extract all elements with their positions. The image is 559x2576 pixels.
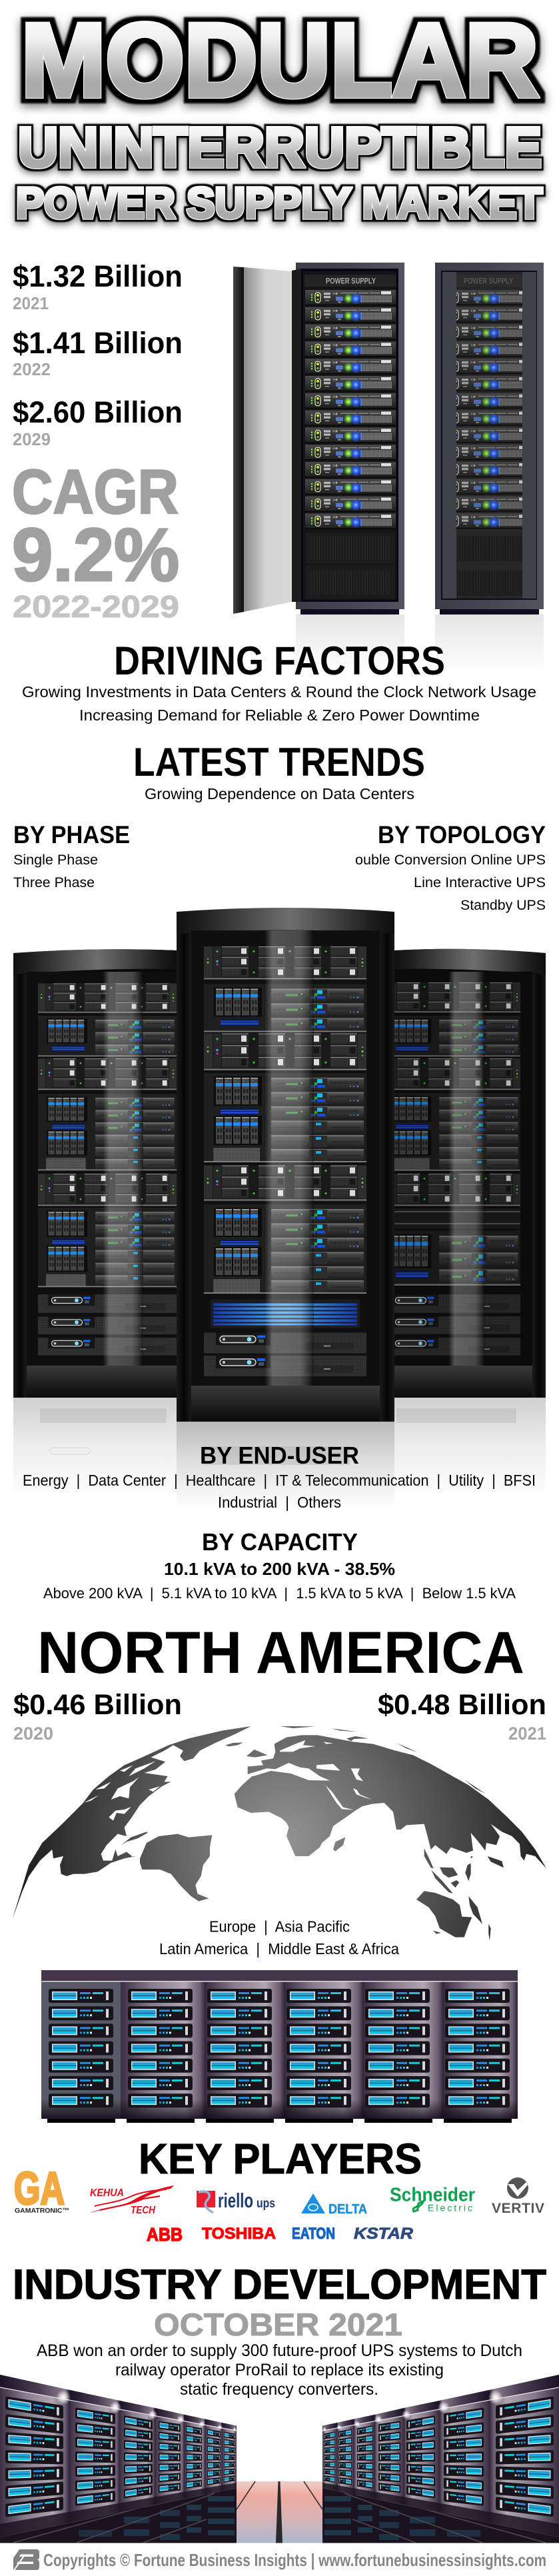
regions line one: Europe | Asia Pacific — [209, 1918, 350, 1935]
by capacity section — [43, 1528, 516, 1602]
key players section — [14, 2135, 544, 2245]
logo: schneider electric: Electric — [428, 2203, 472, 2213]
industry development section — [13, 2261, 546, 2399]
title line: uninterruptible: UNINTERRUPTIBLE — [18, 116, 542, 179]
regions line two: Latin America | Middle East & Africa — [159, 1940, 399, 1957]
by topology list — [355, 821, 546, 913]
factor one: Growing Investments in Data Centers & Round the Clock Network Usage — [22, 683, 536, 700]
illustration: open and closed server racks — [233, 263, 544, 675]
heading: NORTH AMERICA — [37, 1619, 524, 1686]
driving factors section — [22, 639, 536, 724]
cagr label: CAGR — [12, 457, 179, 527]
heading: BY TOPOLOGY — [378, 821, 546, 848]
right server bank — [322, 2375, 559, 2543]
logo: kstar: KSTAR — [354, 2225, 414, 2243]
title line: power supply market: POWER SUPPLY MARKET — [16, 179, 542, 227]
illustration: server block — [41, 1970, 518, 2123]
heading: LATEST TRENDS — [133, 740, 425, 784]
icon: fortune business insights logo — [13, 2549, 39, 2570]
reflections under racks — [13, 1398, 546, 1508]
logo: schneider electric — [390, 2185, 475, 2213]
value 2020: $0.46 Billion — [13, 1689, 182, 1721]
heading: BY PHASE — [13, 821, 130, 848]
north america section — [12, 1619, 546, 1957]
world map — [12, 1726, 546, 1941]
by end-user section — [23, 1442, 536, 1511]
logo: kehua tech: TECH — [131, 2205, 155, 2216]
item: Single Phase — [13, 852, 98, 868]
logo: kehua tech — [89, 2185, 174, 2216]
cagr period: 2022-2029 — [13, 589, 179, 624]
logo: delta: DELTA — [328, 2202, 367, 2217]
logo: riello ups — [197, 2189, 275, 2213]
latest trends section — [133, 740, 425, 802]
rack reflections — [296, 615, 544, 675]
logo: riello ups: riello — [218, 2189, 253, 2212]
item: ouble Conversion Online UPS — [355, 852, 546, 868]
left server bank — [0, 2375, 237, 2543]
other segments: Above 200 kVA | 5.1 kVA to 10 kVA | 1.5 kVA to 5 kVA | Below 1.5 kVA — [43, 1585, 516, 1602]
cagr block — [12, 457, 179, 624]
eurasia, africa and oceania — [235, 1726, 546, 1941]
heading: INDUSTRY DEVELOPMENT — [13, 2261, 546, 2308]
aisle floor — [237, 2481, 322, 2543]
logo: schneider electric: Schneider — [390, 2185, 475, 2206]
logo: gamatronic: GA — [14, 2163, 65, 2214]
value 2022: $1.41 Billion — [13, 326, 183, 360]
heading: DRIVING FACTORS — [114, 639, 445, 683]
year 2022: 2022 — [13, 359, 51, 379]
item: Line Interactive UPS — [414, 875, 546, 890]
left rack — [13, 949, 177, 1398]
factor two: Increasing Demand for Reliable & Zero Power Downtime — [79, 706, 480, 724]
rack label dim: POWER SUPPLY — [464, 277, 513, 285]
logo: toshiba: TOSHIBA — [202, 2225, 276, 2243]
leading segment: 10.1 kVA to 200 kVA - 38.5% — [164, 1559, 395, 1579]
year 2021: 2021 — [508, 1724, 546, 1744]
heading: BY CAPACITY — [202, 1528, 358, 1556]
americas and greenland — [12, 1726, 268, 1920]
segments line one: Energy | Data Center | Healthcare | IT & Telecommunication | Utility | BFSI — [23, 1472, 536, 1489]
logo: riello ups: ups — [257, 2197, 275, 2211]
illustration: three data center racks — [13, 908, 546, 1508]
value 2021: $0.48 Billion — [378, 1689, 546, 1721]
cagr value: 9.2% — [12, 513, 179, 597]
closed rack — [435, 263, 544, 615]
year 2020: 2020 — [13, 1724, 53, 1744]
center rack — [177, 908, 394, 1422]
logo: vertiv: VERTIV — [492, 2201, 544, 2216]
description line two: railway operator ProRail to replace its existing — [115, 2361, 444, 2379]
by phase list — [13, 821, 130, 890]
trend text: Growing Dependence on Data Centers — [145, 785, 414, 802]
logo: eaton: EATON — [292, 2225, 335, 2243]
heading: BY END-USER — [200, 1442, 359, 1469]
item: Standby UPS — [460, 898, 546, 913]
heading: KEY PLAYERS — [139, 2135, 422, 2183]
item: Three Phase — [13, 875, 95, 890]
market size statistics — [13, 259, 183, 449]
right rack — [382, 949, 546, 1398]
title — [16, 3, 542, 227]
date: OCTOBER 2021 — [154, 2307, 402, 2342]
year 2029: 2029 — [13, 429, 51, 449]
value 2029: $2.60 Billion — [13, 395, 183, 429]
title line: modular: MODULAR — [21, 3, 538, 119]
year 2021: 2021 — [13, 293, 49, 313]
logo: delta — [301, 2193, 367, 2217]
description line one: ABB won an order to supply 300 future-proof UPS systems to Dutch — [37, 2341, 522, 2360]
logo: vertiv — [492, 2177, 544, 2216]
logo: gamatronic: GAMATRONIC™ — [15, 2207, 69, 2215]
logo: abb: ABB — [147, 2224, 183, 2245]
open rack — [233, 263, 404, 615]
illustration: data center aisle — [0, 2375, 559, 2543]
footer — [13, 2549, 546, 2570]
value 2021: $1.32 Billion — [13, 259, 183, 293]
logo: kehua tech: KEHUA — [90, 2187, 124, 2199]
description line three: static frequency converters. — [180, 2380, 378, 2399]
segments line two: Industrial | Others — [218, 1494, 341, 1511]
rack label: POWER SUPPLY — [326, 277, 376, 285]
